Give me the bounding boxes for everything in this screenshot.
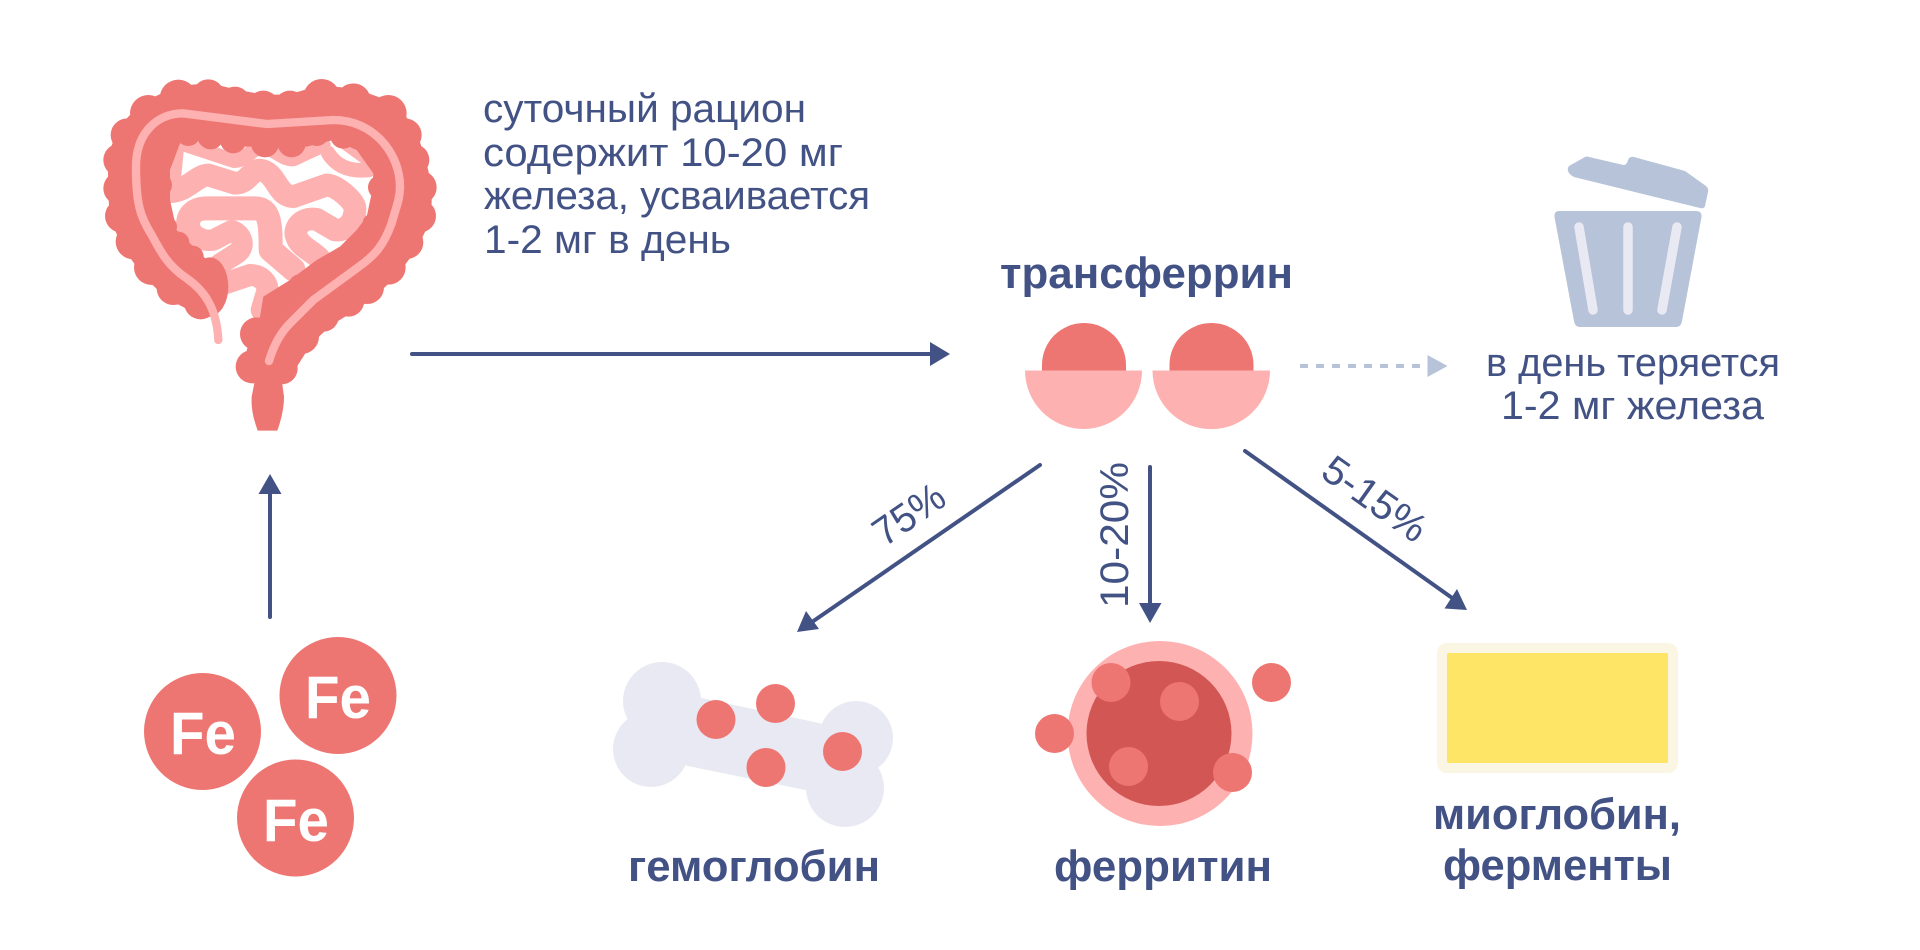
- label: myoglobin, enzymes: миоглобин,: [1433, 790, 1681, 839]
- label: hemoglobin: гемоглобин: [628, 842, 880, 891]
- heading: transferrin: трансферрин: [1000, 249, 1293, 298]
- label: myoglobin, enzymes: ферменты: [1443, 841, 1672, 890]
- label: 75%: 75%: [865, 475, 954, 555]
- text: daily iron loss: в день теряется: [1486, 341, 1780, 385]
- iron atom top: [280, 637, 396, 754]
- icon: yellow muscle block: [1437, 643, 1678, 773]
- text: daily iron loss: [1486, 341, 1780, 428]
- label: 10-20%: 10-20%: [1093, 462, 1137, 608]
- label: myoglobin, enzymes: [1433, 790, 1681, 890]
- icon: intestine: [103, 79, 437, 431]
- icon: transferrin molecules: [1025, 323, 1270, 429]
- text: daily intake: суточный рацион: [483, 87, 806, 131]
- arrow: iron to intestine: [258, 474, 282, 617]
- arrow: to ferritin: [1139, 467, 1162, 623]
- text: daily iron loss: 1-2 мг железа: [1501, 384, 1765, 428]
- arrow: to hemoglobin: [797, 465, 1040, 632]
- colon: [103, 79, 437, 431]
- iron atom bottom: Fe: [263, 787, 329, 854]
- iron atom top: Fe: [305, 664, 371, 731]
- text: daily intake: железа, усваивается: [484, 174, 870, 218]
- iron atom left: Fe: [170, 700, 236, 767]
- icon: trash bin: [1554, 156, 1708, 327]
- icon: ferritin: [1035, 641, 1291, 826]
- arrow: to myoglobin: [1245, 451, 1467, 610]
- text: daily intake: 1-2 мг в день: [484, 218, 731, 262]
- iron atom left: [144, 673, 261, 790]
- label: 5-15%: 5-15%: [1314, 447, 1435, 551]
- small intestine: [170, 143, 368, 310]
- iron atom bottom: [237, 760, 354, 876]
- text: daily intake: содержит 10-20 мг: [483, 131, 843, 175]
- icon: iron atoms: [144, 637, 396, 876]
- label: ferritin: ферритин: [1054, 842, 1272, 891]
- arrow: dotted iron loss: [1300, 355, 1448, 377]
- arrow: intestine to transferrin: [412, 342, 950, 366]
- text: daily intake: [483, 87, 870, 262]
- icon: bone: [613, 662, 893, 827]
- colon highlight: [136, 113, 400, 361]
